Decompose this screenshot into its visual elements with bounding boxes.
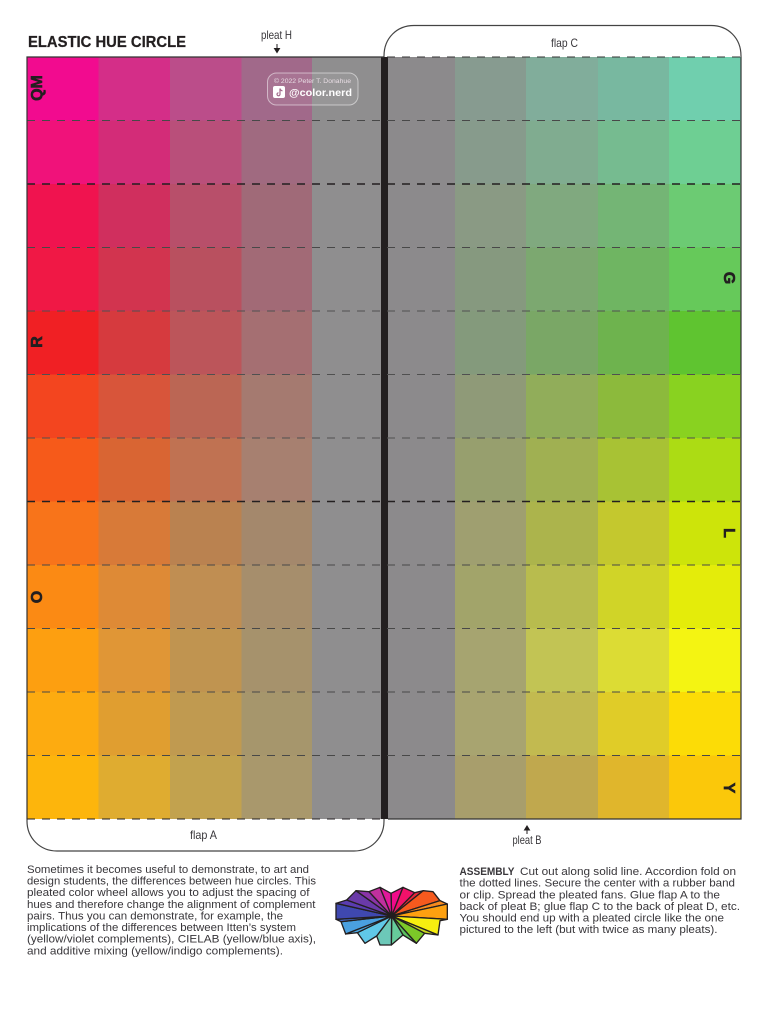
assembly text block: or clip. Spread the pleated fans. Glue flap A to the: [460, 890, 720, 902]
intro text block: implications of the differences between Itten’s system: [27, 922, 296, 934]
assembly text block: [460, 866, 740, 936]
intro text block: pairs. Thus you can demonstrate, for example, the: [27, 910, 283, 922]
assembly text block: the dotted lines. Secure the center with a rubber band: [460, 878, 735, 890]
intro text block: (yellow/violet complements), CIELAB (yellow/blue axis),: [27, 934, 316, 946]
hue label L: L: [720, 528, 737, 538]
label: pleat B: pleat B: [512, 833, 542, 847]
label: pleat H: [261, 28, 292, 52]
pleated color wheel icon: [336, 887, 447, 945]
intro text block: pleated color wheel allows you to adjust the spacing of: [27, 887, 310, 899]
credit badge: @color.nerd: [289, 87, 352, 99]
flap C outline: [384, 26, 741, 57]
hue label O: O: [29, 591, 46, 603]
hue label QM: QM: [29, 75, 46, 101]
intro text block: design students, the differences between hue circles. This: [27, 876, 316, 888]
flap A outline: [27, 819, 384, 851]
label: flap A: flap A: [190, 828, 217, 842]
title: ELASTIC HUE CIRCLE: [28, 34, 186, 51]
assembly text block: You should end up with a pleated circle like the one: [460, 912, 724, 924]
intro text block: [27, 864, 316, 958]
label: flap C: flap C: [551, 36, 578, 50]
assembly text block: ASSEMBLY: [460, 866, 515, 878]
hue label G: G: [720, 272, 737, 284]
intro text block: hues and therefore change the alignment of complement: [27, 899, 316, 911]
assembly text block: pictured to the left (but with twice as many pleats).: [460, 924, 718, 936]
intro text block: and additive mixing (yellow/indigo complements).: [27, 946, 283, 958]
hue label R: R: [29, 336, 46, 348]
assembly text block: back of pleat B; glue flap C to the back of pleat D, etc.: [460, 901, 740, 913]
cut outline: [27, 57, 741, 819]
label: pleat H: pleat H: [261, 28, 292, 42]
center black bar: [380, 57, 388, 819]
color grid: [27, 57, 741, 819]
credit badge: © 2022 Peter T. Donahue: [274, 77, 351, 85]
assembly text block: Cut out along solid line. Accordion fold on: [520, 866, 736, 878]
hue label Y: Y: [720, 783, 737, 794]
credit badge: [268, 73, 358, 105]
fold lines: [27, 57, 741, 819]
intro text block: Sometimes it becomes useful to demonstrate, to art and: [27, 864, 309, 876]
label: pleat B: [512, 826, 542, 847]
